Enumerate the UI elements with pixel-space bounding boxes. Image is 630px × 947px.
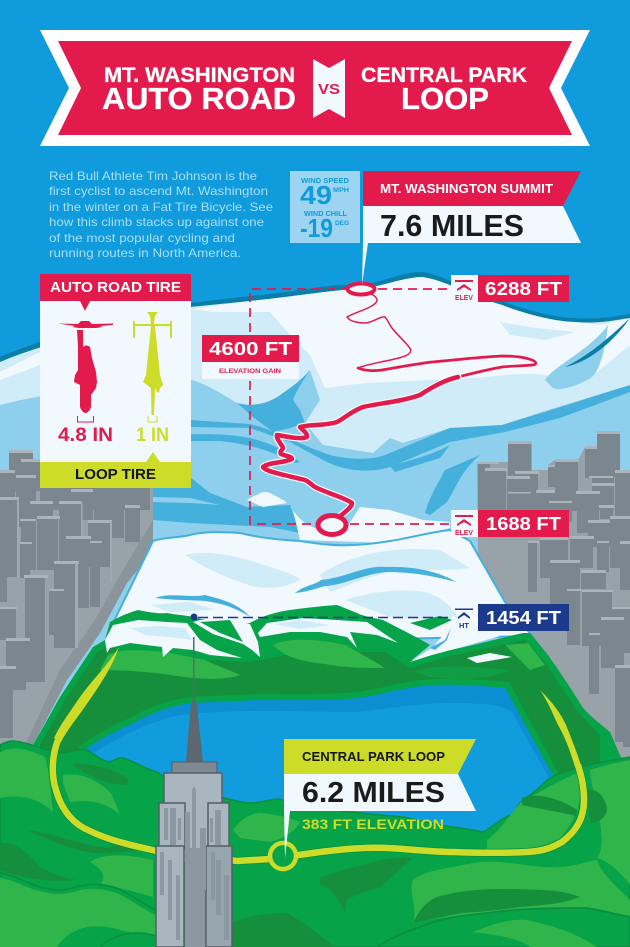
heading: Auto Road tire (40, 274, 191, 311)
panel: wind stats (290, 171, 360, 243)
marker: base (318, 516, 346, 534)
label: 6288 ft: 6288 FT (485, 279, 562, 299)
label: 1454 ft: 1454 FT (486, 608, 561, 628)
vs ribbon: VS (318, 81, 340, 98)
heading: Auto Road tire: AUTO ROAD TIRE (50, 280, 181, 296)
callout: Central Park loop (284, 739, 476, 858)
intro text: Red Bull Athlete Tim Johnson is the (49, 169, 257, 183)
callout: elevation gain (202, 335, 299, 379)
heading: Mt. Washington Auto Road: MT. WASHINGTON (104, 63, 295, 87)
heading: Central Park Loop (361, 63, 527, 116)
measure: 4.8 in: 4.8 IN (58, 425, 113, 446)
panel: wind stats: -19 (300, 213, 333, 243)
hill: Central Park back hill (0, 605, 630, 947)
panel: tire comparison (40, 274, 191, 488)
title banner (40, 30, 590, 146)
mountain: Mt. Washington snowy massif (0, 272, 630, 770)
landmark: Empire State Building (156, 637, 232, 947)
intro text (49, 169, 273, 260)
label: 6288 ft: ELEV (455, 295, 473, 302)
callout: Central Park loop: 383 FT ELEVATION (302, 817, 444, 832)
callout: elevation gain: ELEVATION GAIN (219, 368, 281, 375)
label: 1688 ft: ELEV (455, 530, 473, 537)
elevation guide: dashed lines (250, 289, 451, 524)
intro text: in the winter on a Fat Tire Bicycle. See (49, 200, 273, 214)
vs ribbon (313, 59, 345, 118)
callout: Mt. Washington summit: 7.6 MILES (380, 208, 524, 243)
heading: loop tire (40, 452, 191, 488)
callout: Central Park loop: CENTRAL PARK LOOP (302, 750, 445, 764)
marker: summit (348, 284, 374, 294)
callout: Mt. Washington summit: MT. WASHINGTON SUMMIT (380, 182, 553, 196)
measure: 1 in (136, 416, 169, 446)
label: 1454 ft (455, 604, 569, 631)
icon: road bicycle (133, 312, 172, 415)
panel: wind stats: DEG (335, 220, 349, 227)
foreground: park trees (0, 741, 630, 947)
marker: Empire State height (190, 614, 198, 620)
callout: Central Park loop: 6.2 MILES (302, 777, 445, 809)
measure: 1 in: 1 IN (136, 425, 169, 446)
callout: elevation gain: 4600 FT (209, 339, 292, 359)
city: right skyline (477, 431, 630, 770)
heading: Central Park Loop: CENTRAL PARK (361, 63, 527, 87)
city: left skyline (0, 450, 153, 745)
label: 1688 ft: 1688 FT (486, 514, 561, 534)
lake (82, 682, 556, 835)
callout: Mt. Washington summit (362, 171, 581, 285)
label: 1454 ft: HT (459, 623, 470, 630)
panel: wind stats: WIND SPEED (301, 178, 349, 185)
panel: wind stats: MPH (333, 187, 349, 194)
route: Mt. Washington Auto Road (263, 290, 536, 519)
intro text: of the most popular cycling and (49, 231, 235, 245)
heading: Mt. Washington Auto Road (102, 63, 296, 116)
elevation guide: navy dashed line (198, 616, 452, 618)
measure: 4.8 in (58, 416, 113, 446)
panel: wind stats: 49 (300, 180, 332, 210)
label: 6288 ft (451, 275, 569, 302)
mountain: lower snowfield (104, 530, 532, 645)
label: 1688 ft (451, 510, 569, 537)
intro text: how this climb stacks up against one (49, 215, 264, 229)
heading: Central Park Loop: LOOP (401, 81, 489, 116)
heading: loop tire: LOOP TIRE (75, 467, 156, 483)
route: Central Park loop (53, 647, 584, 869)
intro text: first cyclist to ascend Mt. Washington (49, 184, 268, 198)
intro text: running routes in North America. (49, 246, 241, 260)
panel: wind stats: WIND CHILL (304, 211, 348, 218)
heading: Mt. Washington Auto Road: AUTO ROAD (102, 81, 296, 116)
icon: fat tire bicycle (58, 321, 113, 413)
